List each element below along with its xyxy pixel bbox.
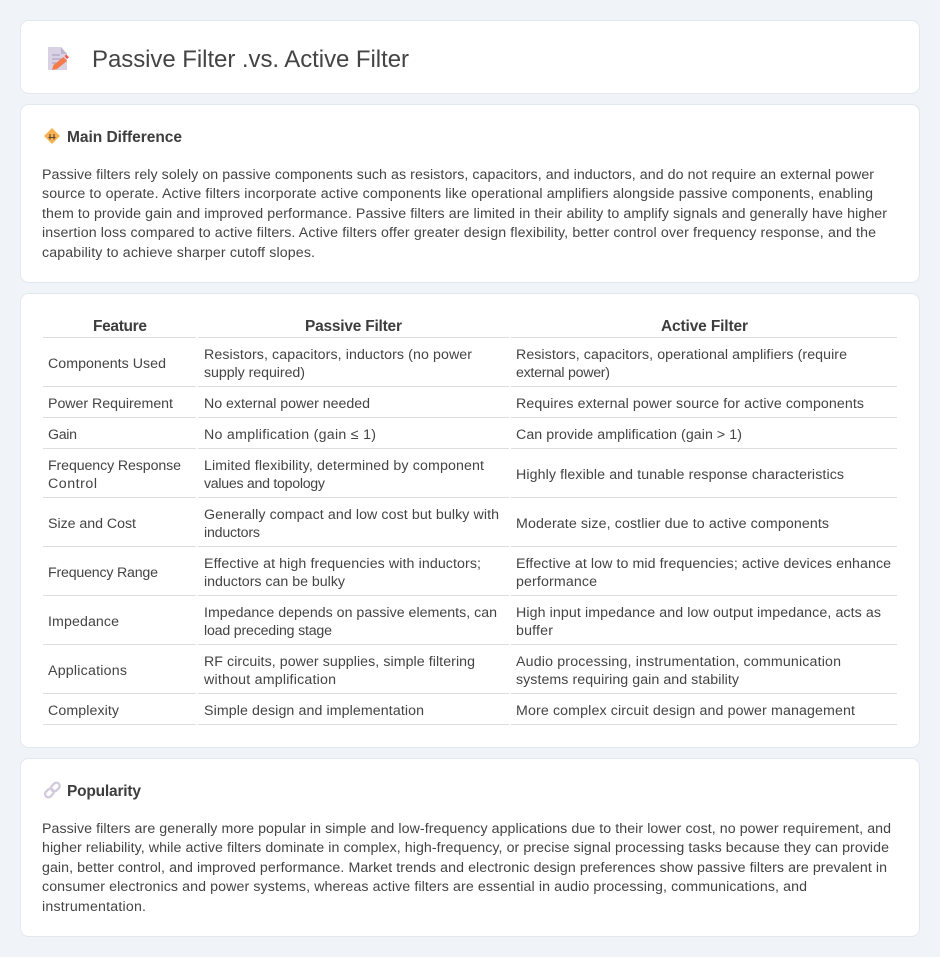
panel: popularity — [20, 758, 920, 936]
icon: orange warning diamond — [44, 128, 60, 144]
table row: impedance — [43, 605, 897, 644]
text block: main difference paragraph: capability to achieve sharper cutoff slopes. — [42, 245, 315, 261]
table row: components used: Components Used — [48, 356, 166, 372]
table row: impedance: load preceding stage — [204, 623, 332, 639]
text block: main difference paragraph: source to operate. Active filters incorporate active components like operational amplifiers alongside passive components, enabling — [42, 186, 873, 202]
text block: popularity paragraph: higher reliability, while active filters dominate in complex, high-frequency, or precise signal processing tasks because they can provide — [42, 840, 889, 856]
table row: frequency range: Effective at high frequencies with inductors; — [204, 556, 481, 572]
table row: impedance: High input impedance and low output impedance, acts as — [516, 605, 881, 621]
table row: frequency response control: Frequency Response — [48, 458, 181, 474]
table row: impedance: buffer — [516, 623, 553, 639]
text block: popularity paragraph: gain, better control, and improved performance. Market trends and electronic design preferences show passive filters are prevalent in — [42, 860, 887, 876]
table row: applications: without amplification — [203, 672, 336, 688]
table row: frequency response control — [43, 458, 897, 498]
table row: gain: Gain — [48, 427, 77, 443]
table row: frequency range: Frequency Range — [48, 565, 158, 581]
table row: frequency response control: Highly flexible and tunable response characteristics — [516, 467, 844, 483]
table row: applications: RF circuits, power supplies, simple filtering — [204, 654, 475, 670]
table row: frequency range: Effective at low to mid frequencies; active devices enhance — [516, 556, 891, 572]
panel: main difference — [20, 104, 920, 282]
text block: main difference paragraph — [42, 167, 887, 261]
table row: gain — [43, 427, 897, 448]
table row: impedance: Impedance depends on passive elements, can — [204, 605, 497, 621]
table row: complexity: Complexity — [48, 703, 120, 719]
table row: power requirement: No external power needed — [204, 396, 370, 412]
icon: document with pencil — [48, 47, 69, 70]
table row: size and cost: Size and Cost — [48, 516, 136, 532]
table row: frequency response control: values and topology — [204, 476, 326, 492]
panel: title header — [20, 20, 920, 94]
panel: comparison table — [20, 294, 920, 748]
icon: chain link — [44, 781, 61, 799]
table row: power requirement: Requires external power source for active components — [516, 396, 864, 412]
table row: components used — [43, 347, 897, 386]
table row: impedance: Impedance — [48, 614, 119, 630]
table row: complexity: More complex circuit design and power management — [516, 703, 855, 719]
title: Passive Filter .vs. Active Filter — [92, 46, 409, 73]
table row: size and cost: inductors — [204, 525, 260, 541]
table row: frequency range: inductors can be bulky — [204, 574, 346, 590]
table row: frequency response control: Control — [48, 476, 97, 492]
table row: power requirement: Power Requirement — [48, 396, 173, 412]
text block: popularity paragraph: instrumentation. — [42, 899, 146, 915]
table header row: Active Filter — [661, 318, 748, 335]
text block: main difference paragraph: insertion loss compared to active filters. Active filters offer greater design flexibility, better control over frequency response, and the — [42, 225, 876, 241]
table row: frequency response control: Limited flexibility, determined by component — [204, 458, 484, 474]
table row: applications: Applications — [48, 663, 127, 679]
text block: popularity paragraph: consumer electronics and power systems, whereas active filters are essential in audio processing, communications, and — [42, 879, 807, 895]
table row: applications: systems requiring gain and stability — [516, 672, 740, 688]
table row: size and cost: Moderate size, costlier due to active components — [516, 516, 829, 532]
table row: components used: external power) — [516, 365, 610, 381]
table row: size and cost: Generally compact and low cost but bulky with — [204, 507, 499, 523]
table header row — [43, 318, 897, 338]
text block: popularity paragraph — [42, 821, 891, 915]
table row: components used: supply required) — [204, 365, 305, 381]
table header row: Passive Filter — [305, 318, 402, 335]
text block: popularity paragraph: Passive filters are generally more popular in simple and low-frequency applications due to their lower cost, no power requirement, and — [42, 821, 891, 837]
table row: gain: Can provide amplification (gain > 1) — [516, 427, 742, 443]
table row: components used: Resistors, capacitors, inductors (no power — [204, 347, 472, 363]
text block: main difference paragraph: Passive filters rely solely on passive components such as resistors, capacitors, and inductors, and do not require an external power — [42, 167, 874, 183]
table row: frequency range: performance — [516, 574, 597, 590]
table row: applications: Audio processing, instrumentation, communication — [516, 654, 841, 670]
table row: complexity — [43, 703, 897, 724]
table row: gain: No amplification (gain ≤ 1) — [204, 427, 376, 443]
table row: components used: Resistors, capacitors, operational amplifiers (require — [516, 347, 847, 363]
table row: applications — [43, 654, 897, 694]
heading: popularity: Popularity — [67, 783, 141, 800]
table row: complexity: Simple design and implementation — [204, 703, 424, 719]
table header row: Feature — [93, 318, 147, 335]
table row: size and cost — [43, 507, 897, 546]
table row: frequency range — [43, 556, 897, 596]
text block: main difference paragraph: them to provide gain and improved performance. Passive filters are limited in their ability to amplify signals and generally have higher — [42, 206, 887, 222]
heading: main difference: Main Difference — [67, 129, 182, 146]
table row: power requirement — [43, 396, 897, 418]
